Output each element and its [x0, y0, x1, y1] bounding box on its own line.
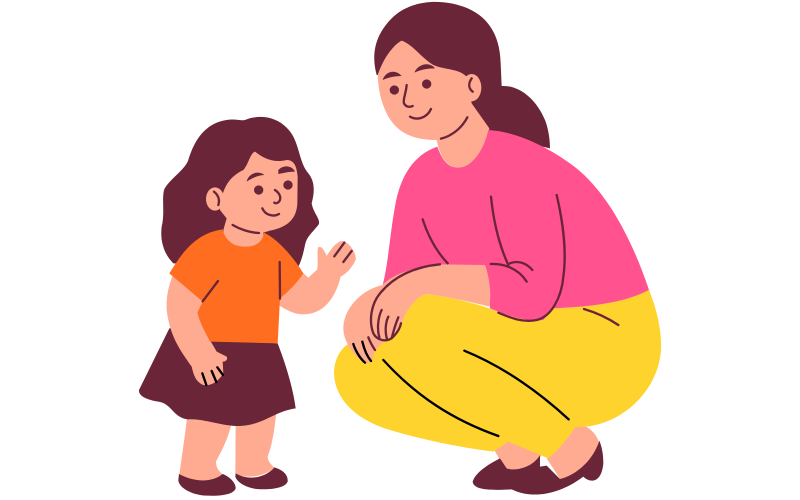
- woman legs: [493, 425, 599, 479]
- woman hair and ponytail: [374, 2, 550, 148]
- woman neck: [437, 103, 489, 168]
- woman face: [378, 41, 472, 140]
- girl facial features: [214, 166, 295, 233]
- girl orange shirt: [169, 229, 303, 343]
- girl maroon skirt: [139, 323, 296, 426]
- figure: little girl: [139, 117, 356, 496]
- woman pink sweater: [383, 130, 649, 320]
- girl ear: [206, 187, 224, 211]
- girl shirt and finger lines: [203, 243, 352, 301]
- girl black hand lines: [202, 367, 223, 385]
- girl legs: [179, 407, 277, 480]
- woman arm and hand on knee: [343, 264, 490, 363]
- woman black trouser and finger lines: [353, 342, 569, 436]
- woman yellow trousers: [334, 290, 661, 458]
- girl wavy hair: [161, 117, 319, 267]
- figure: woman crouching: [334, 2, 661, 495]
- woman facial features: [383, 64, 473, 139]
- girl left arm and hand: [167, 273, 227, 385]
- girl raised arm and waving hand: [277, 241, 356, 314]
- girl face and neck: [220, 152, 298, 253]
- girl shoes: [178, 467, 288, 496]
- woman shoes: [473, 441, 603, 495]
- woman ear: [462, 74, 481, 101]
- woman sweater and arm crease lines: [368, 195, 618, 350]
